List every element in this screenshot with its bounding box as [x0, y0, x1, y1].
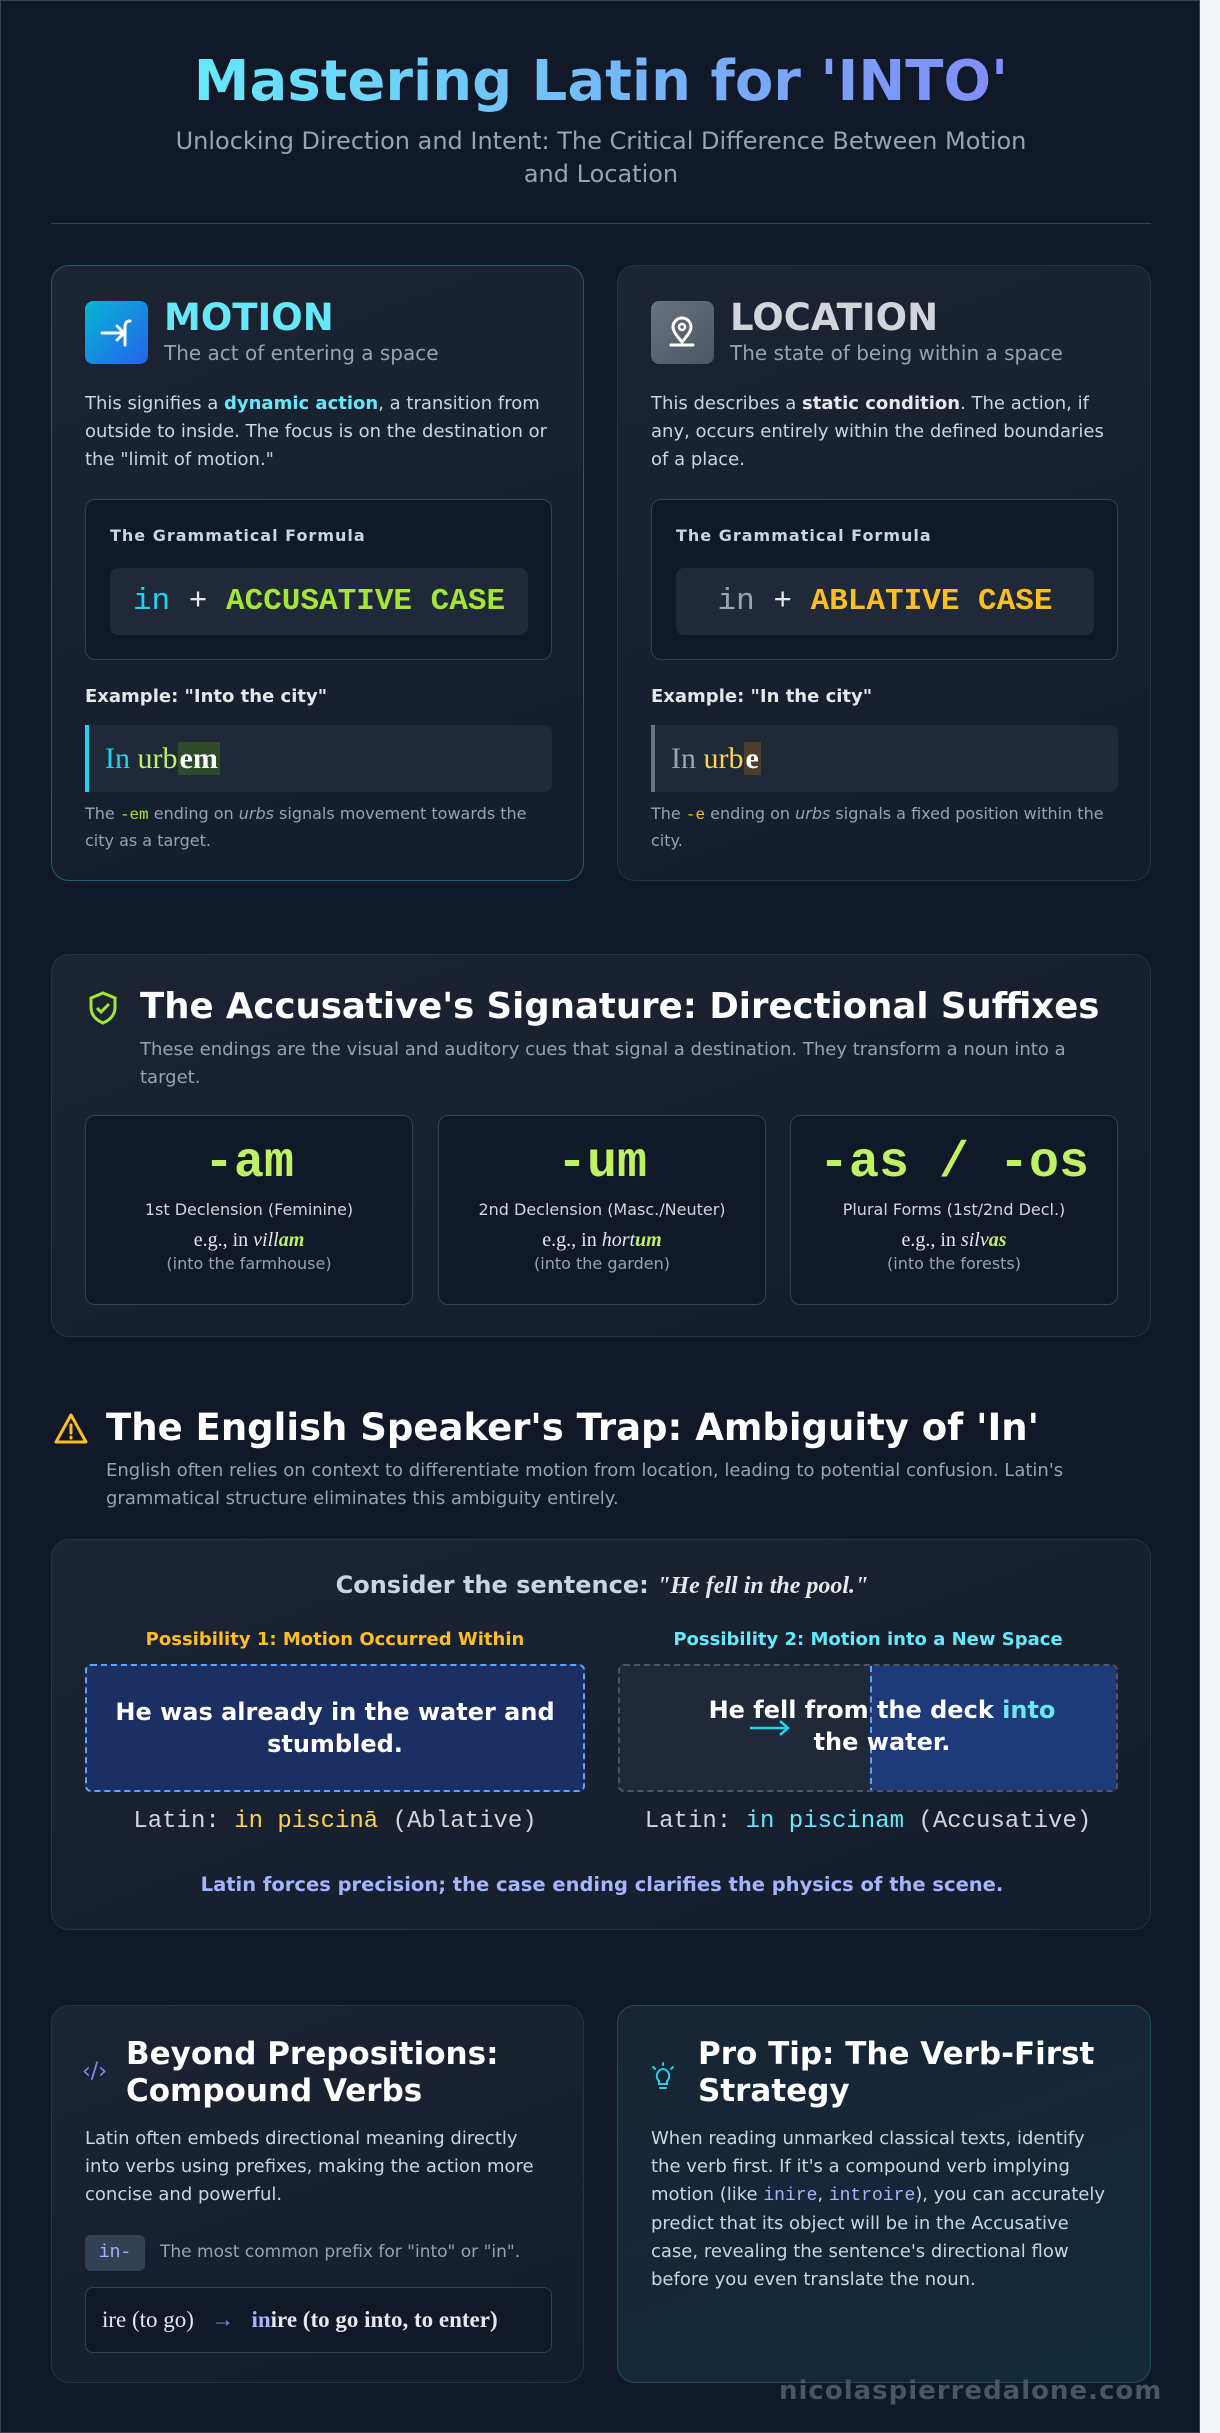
panel: directional suffixes: [51, 954, 1151, 1337]
possibility 2: Latin: in piscinam (Accusative): [645, 1808, 1091, 1835]
panel: location: In urbe: [671, 742, 759, 775]
panel: pro tip: [617, 2005, 1151, 2383]
suffix: -um: (into the garden): [534, 1254, 670, 1273]
text: motion description: This signifies a dynamic action, a transition from outside to inside. The focus is on the destination or the "limit of motion.": [85, 393, 547, 470]
example: Example: "Into the city": [85, 686, 327, 707]
suffix: -um: 2nd Declension (Masc./Neuter): [478, 1200, 726, 1219]
subtitle: Unlocking Direction and Intent: The Critical Difference Between Motion and Location: [176, 127, 1026, 188]
verb example: [85, 2287, 552, 2353]
suffix: -as/-os: [790, 1115, 1118, 1305]
suffix: -um: e.g., in hortum: [542, 1229, 662, 1251]
suffix: -um: -um: [557, 1135, 647, 1192]
panel: ambiguity example: [51, 1539, 1151, 1930]
panel: pro tip: When reading unmarked classical texts, identify the verb first. If it's a compound verb implying motion (like inire, introire), you can accurately predict that its object will be in the Accusative case, revealing the sentence's directional flow before you even translate the noun.: [651, 2128, 1105, 2290]
panel: motion: The act of entering a space: [164, 341, 439, 365]
suffix: -am: -am: [204, 1135, 294, 1192]
panel: location: [617, 265, 1151, 881]
arrow: [750, 1720, 790, 1736]
prefix pill: in-: [99, 2243, 131, 2263]
icon: enter arrow: [85, 301, 148, 364]
suffix: -as/-os: Plural Forms (1st/2nd Decl.): [843, 1200, 1065, 1219]
panel: compound verbs: [51, 2005, 584, 2383]
icon: warning: [54, 1413, 88, 1444]
suffix: -am: e.g., in villam: [194, 1229, 304, 1251]
suffix: -um: [438, 1115, 766, 1305]
panel: directional suffixes: These endings are the visual and auditory cues that signal a destination. They transform a noun into a target.: [140, 1039, 1066, 1088]
formula box: The Grammatical Formula: [676, 526, 932, 545]
watermark: nicolaspierredalone.com: [779, 2376, 1162, 2406]
heading: location: LOCATION: [730, 296, 938, 339]
panel: compound verbs: The most common prefix for "into" or "in".: [160, 2242, 520, 2262]
suffix: -as/-os: -as / -os: [819, 1135, 1089, 1192]
icon: bulb: [652, 2062, 674, 2089]
icon: map pin: [651, 301, 714, 364]
possibility 1: [85, 1629, 585, 1835]
formula box: [651, 499, 1118, 660]
heading: trap: The English Speaker's Trap: Ambiguity of 'In': [106, 1406, 1039, 1449]
panel: location: The -e ending on urbs signals a fixed position within the city.: [651, 804, 1104, 850]
conclusion: Latin forces precision; the case ending clarifies the physics of the scene.: [201, 1873, 1003, 1896]
panel: motion: [51, 265, 584, 881]
panel: motion: The -em ending on urbs signals movement towards the city as a target.: [85, 804, 526, 850]
possibility 1: Possibility 1: Motion Occurred Within: [146, 1629, 524, 1650]
panel: location: The state of being within a space: [730, 341, 1063, 365]
text: location description: This describes a static condition. The action, if any, occurs entirely within the defined boundaries of a place.: [651, 393, 1104, 470]
possibility 1: He was already in the water and stumbled.: [115, 1698, 555, 1758]
possibility 1: Latin: in piscinā (Ablative): [133, 1808, 537, 1835]
formula box: The Grammatical Formula: [110, 526, 366, 545]
possibility 2: [618, 1629, 1118, 1835]
suffix: -as/-os: (into the forests): [887, 1254, 1021, 1273]
suffix: -am: 1st Declension (Feminine): [145, 1200, 353, 1219]
suffix: -am: (into the farmhouse): [166, 1254, 332, 1273]
icon: shield: [90, 991, 116, 1025]
verb example: ire (to go) → inire (to go into, to enter): [102, 2307, 498, 2332]
prefix pill: [85, 2235, 145, 2271]
icon: code: ‹/›: [82, 2059, 107, 2084]
formula box: [85, 499, 552, 660]
suffix: -as/-os: e.g., in silvas: [901, 1229, 1006, 1251]
example: Example: "In the city": [651, 686, 872, 707]
possibility 2: Possibility 2: Motion into a New Space: [673, 1629, 1063, 1650]
panel: motion: In urbem: [105, 742, 218, 775]
panel: compound verbs: Latin often embeds directional meaning directly into verbs using prefixes, making the action more concise and powerful.: [85, 2128, 534, 2205]
title: Mastering Latin for 'INTO': [194, 49, 1008, 114]
heading: Beyond Prepositions: Compound Verbs: [126, 2036, 498, 2109]
heading: Pro Tip: The Verb-First Strategy: [698, 2036, 1094, 2109]
possibility 2: He fell from the deck into the water.: [709, 1696, 1055, 1756]
heading: The Accusative's Signature: Directional Suffixes: [140, 986, 1099, 1027]
heading: motion: MOTION: [164, 296, 334, 339]
formula box: in + ABLATIVE CASE: [718, 584, 1052, 619]
formula box: in + ACCUSATIVE CASE: [133, 584, 505, 619]
sentence: Consider the sentence: "He fell in the pool.": [336, 1571, 868, 1599]
suffix: -am: [85, 1115, 413, 1305]
text: English often relies on context to differentiate motion from location, leading to potential confusion. Latin's grammatical structure eliminates this ambiguity entirely.: [106, 1460, 1063, 1509]
